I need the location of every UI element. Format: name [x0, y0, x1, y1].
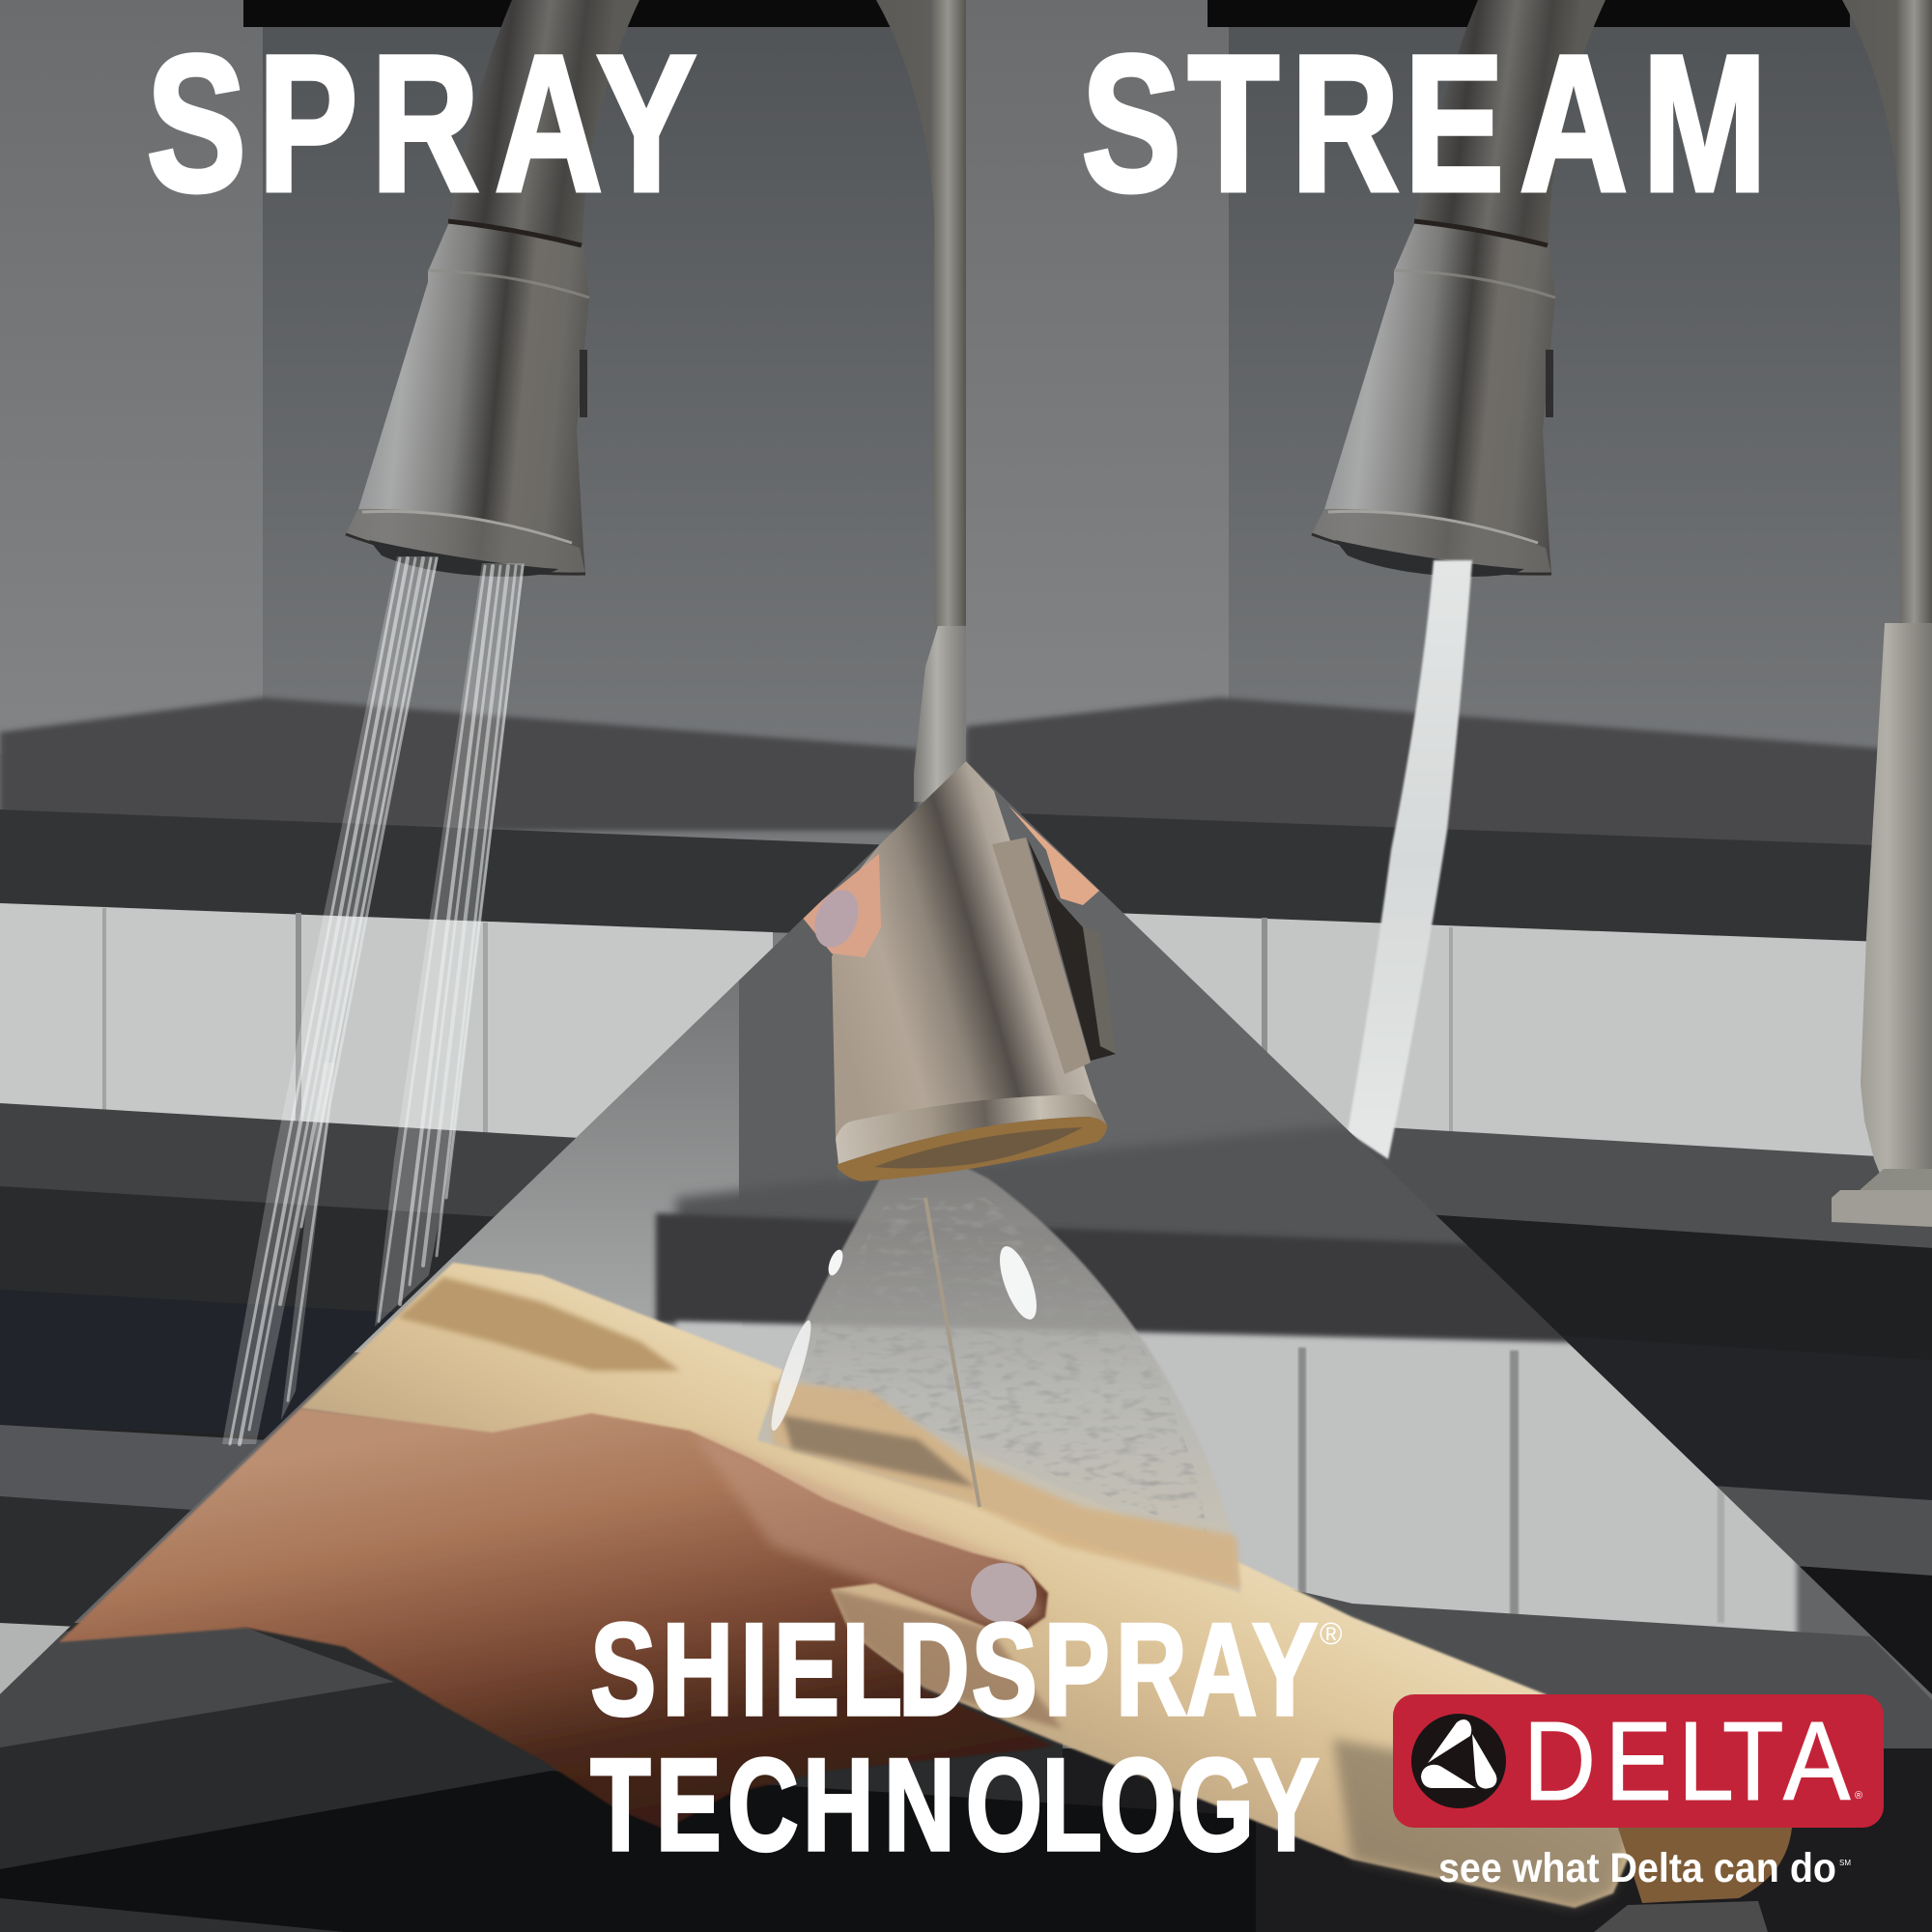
spray head collar [836, 1094, 1107, 1164]
water seam [925, 1198, 980, 1507]
wood hollow [394, 1277, 680, 1371]
wood log [300, 1263, 1642, 1908]
thumb highlight [690, 1431, 1045, 1628]
left finger [802, 854, 881, 957]
shadow on wood beneath the fingers [831, 1589, 1063, 1729]
spray head body [832, 761, 1097, 1139]
water splash at log end [1594, 1901, 1768, 1932]
hand [59, 1408, 1053, 1830]
brown water ring [1618, 1828, 1792, 1903]
stream water column [1348, 560, 1472, 1159]
wood seen through water [772, 1381, 1240, 1589]
shaded end of the log [1333, 1739, 1642, 1908]
spray head switch [992, 838, 1116, 1074]
logo: delta [1393, 1694, 1884, 1828]
logo: delta: ® [1855, 1790, 1862, 1802]
panel: stream background [966, 0, 1932, 1719]
right finger [1009, 806, 1099, 905]
water texture [802, 1198, 1208, 1536]
title: stream: STREAM [1082, 16, 1767, 233]
title: spray: SPRAY [147, 16, 696, 233]
icon: stream faucet base [1832, 623, 1932, 1227]
water bell [757, 1164, 1240, 1593]
fingernail [971, 1563, 1037, 1622]
heading: shieldspray technology: TECHNOLOGY [590, 1732, 1320, 1878]
finger nail [814, 890, 859, 948]
logo: delta: DELTA [1523, 1699, 1851, 1824]
heading: shieldspray technology [590, 1597, 1343, 1878]
icon: spray faucet head and spout [346, 0, 966, 626]
heading: shieldspray technology: SHIELDSPRAY [590, 1597, 1318, 1743]
dark stripe through water [782, 1415, 976, 1488]
tagline: SM [1839, 1859, 1851, 1867]
tagline: see what Delta can do [1438, 1845, 1836, 1891]
panel: shieldspray triangle photo [0, 753, 1932, 1932]
spray head nozzle [837, 1117, 1107, 1181]
icon: stream faucet head and spout [1312, 0, 1932, 626]
spray water streams [222, 556, 525, 1444]
panel: spray background [0, 0, 966, 1719]
water highlights [765, 1242, 1044, 1434]
icon: delta triangle [1411, 1714, 1506, 1808]
heading: shieldspray technology: ® [1320, 1616, 1343, 1651]
